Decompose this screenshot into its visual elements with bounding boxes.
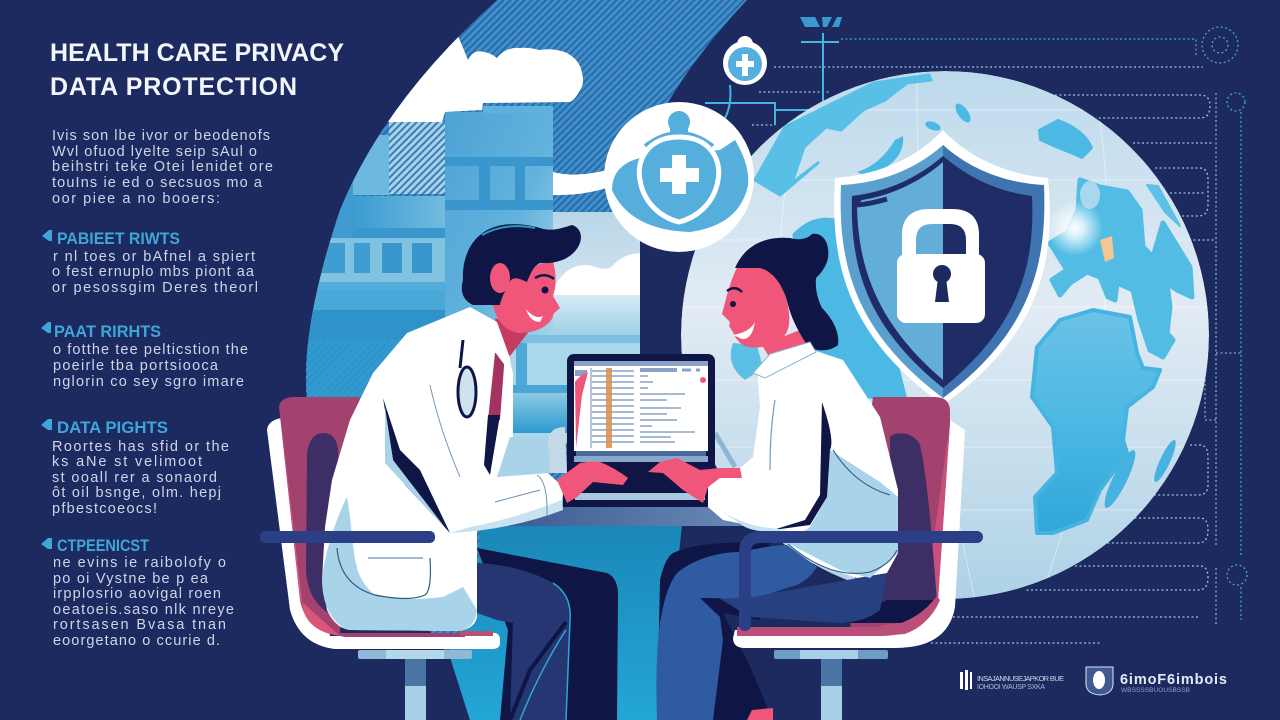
- woman trousers: [656, 542, 887, 720]
- woman seat: [733, 596, 940, 648]
- low cloud: [554, 253, 640, 295]
- section: DATA PIGHTS: pfbestcoeocs!: [52, 501, 157, 517]
- section: PAAT RIRHTS: o fotthe tee pelticstion the: [53, 342, 248, 358]
- section: PAAT RIRHTS: [41, 322, 248, 390]
- mid building: [353, 196, 445, 228]
- woman shirt: [708, 350, 898, 578]
- section: CTPEENICST: eoorgetano o ccurie d.: [53, 633, 220, 649]
- continent: Africa: [1032, 310, 1160, 533]
- section: PAAT RIRHTS: PAAT RIRHTS: [54, 323, 161, 341]
- hair: [462, 224, 581, 305]
- tie and stethoscope: [488, 353, 505, 420]
- large medical badge: [604, 102, 754, 252]
- main building: [445, 112, 553, 352]
- section: PABIEET RIWTS: r nl toes or bAfnel a spiert: [53, 249, 255, 265]
- intro text: Wvl ofuod lyelte seip sAul o: [52, 144, 257, 160]
- woman hand: [648, 458, 742, 503]
- coat lower shading: [322, 497, 477, 631]
- section: PAAT RIRHTS: nglorin co sey sgro imare: [53, 374, 244, 390]
- doctor neck: [495, 318, 530, 356]
- doctor's chair: [267, 397, 493, 720]
- section: DATA PIGHTS: st ooall rer a sonaord: [52, 470, 217, 486]
- far left building: [306, 182, 353, 392]
- footer logo left: INSAJANNUSEJAPKOR BUE: [977, 674, 1064, 683]
- section: CTPEENICST: ne evins ie raibolofy o: [53, 555, 226, 571]
- section: DATA PIGHTS: Roortes has sfid or the: [52, 439, 229, 455]
- footer logo right: [1086, 667, 1227, 695]
- continent: north: [755, 75, 931, 195]
- globe grid: [680, 71, 1210, 600]
- woman head: [722, 234, 838, 380]
- hair: [735, 234, 838, 350]
- lower city: [306, 342, 308, 396]
- sleeve: [450, 475, 563, 533]
- section: PABIEET RIWTS: PABIEET RIWTS: [57, 230, 180, 248]
- woman armrest: [745, 537, 977, 625]
- section: PAAT RIRHTS: poeirle tba portsiooca: [53, 358, 219, 374]
- title: DATA PROTECTION: [50, 73, 297, 101]
- white cloud top: [388, 37, 584, 122]
- footer logo left: IOHOOI WAUSP SXKA: [977, 684, 1045, 691]
- coat dark wedge: [383, 398, 450, 533]
- lower teal floor: [450, 526, 682, 720]
- lower sky: [553, 212, 640, 286]
- scene circle: city and sky: [290, 0, 760, 720]
- section: DATA PIGHTS: [41, 419, 229, 517]
- desk: [500, 507, 775, 526]
- doctor collar: [470, 307, 512, 375]
- section: DATA PIGHTS: ks aNe st velimoot: [52, 454, 202, 470]
- section: CTPEENICST: rortsasen Bvasa tnan: [53, 617, 226, 633]
- continent: behind shield: [795, 220, 905, 400]
- section: CTPEENICST: irpplosrio aovigal roen: [53, 586, 221, 602]
- globe: [680, 71, 1210, 600]
- continent: Eurasia: [1050, 180, 1192, 357]
- intro text: Ivis son lbe ivor or beodenofs: [52, 128, 270, 144]
- data glow: [1080, 181, 1100, 209]
- intro text: oor piee a no booers:: [52, 191, 220, 207]
- island streak: [857, 136, 903, 174]
- footer logo right: WBSSSSBUOUSBSSB: [1121, 687, 1190, 694]
- doctor coat: [322, 307, 567, 631]
- small medical badge: [723, 36, 767, 85]
- section: PABIEET RIWTS: or pesossgim Deres theorl: [52, 280, 258, 296]
- intro text: [52, 128, 273, 207]
- section: CTPEENICST: CTPEENICST: [57, 537, 149, 555]
- inner shirt and lapel: [497, 437, 550, 477]
- section: DATA PIGHTS: ôt oil bsnge, olm. hepj: [52, 485, 221, 501]
- laptop: [563, 354, 735, 508]
- section: CTPEENICST: oeatoeis.saso nlk nreye: [53, 602, 234, 618]
- doctor trousers: [477, 548, 618, 720]
- footer logo right: 6imoF6imbois: [1120, 672, 1227, 688]
- section: DATA PIGHTS: DATA PIGHTS: [57, 419, 168, 437]
- section: PABIEET RIWTS: o fest ernuplo mbs piont aa: [52, 264, 255, 280]
- section: CTPEENICST: [41, 537, 234, 649]
- woman collar: [753, 342, 816, 378]
- shield: [834, 130, 1050, 405]
- doctor hand: [557, 462, 628, 503]
- circuit lines: [752, 27, 1247, 643]
- doctor seat edge: [460, 631, 500, 649]
- section: CTPEENICST: po oi Vystne be p ea: [53, 571, 209, 587]
- doctor armrest: [260, 531, 435, 543]
- hatched building: [389, 122, 445, 194]
- shirt shading: [787, 450, 898, 578]
- intro text: touIns ie ed o secsuos mo a: [52, 175, 263, 191]
- title: [50, 39, 344, 101]
- woman's chair: [760, 397, 965, 720]
- intro text: beihstri teke Otei lenidet ore: [52, 159, 273, 175]
- white cloud right: [553, 170, 605, 196]
- title: HEALTH CARE PRIVACY: [50, 39, 344, 67]
- doctor head: [462, 224, 581, 333]
- section: PABIEET RIWTS: [42, 230, 258, 296]
- footer logo left: [960, 670, 1064, 691]
- padlock: [897, 209, 985, 323]
- circuit solid connectors and antenna: [705, 17, 842, 125]
